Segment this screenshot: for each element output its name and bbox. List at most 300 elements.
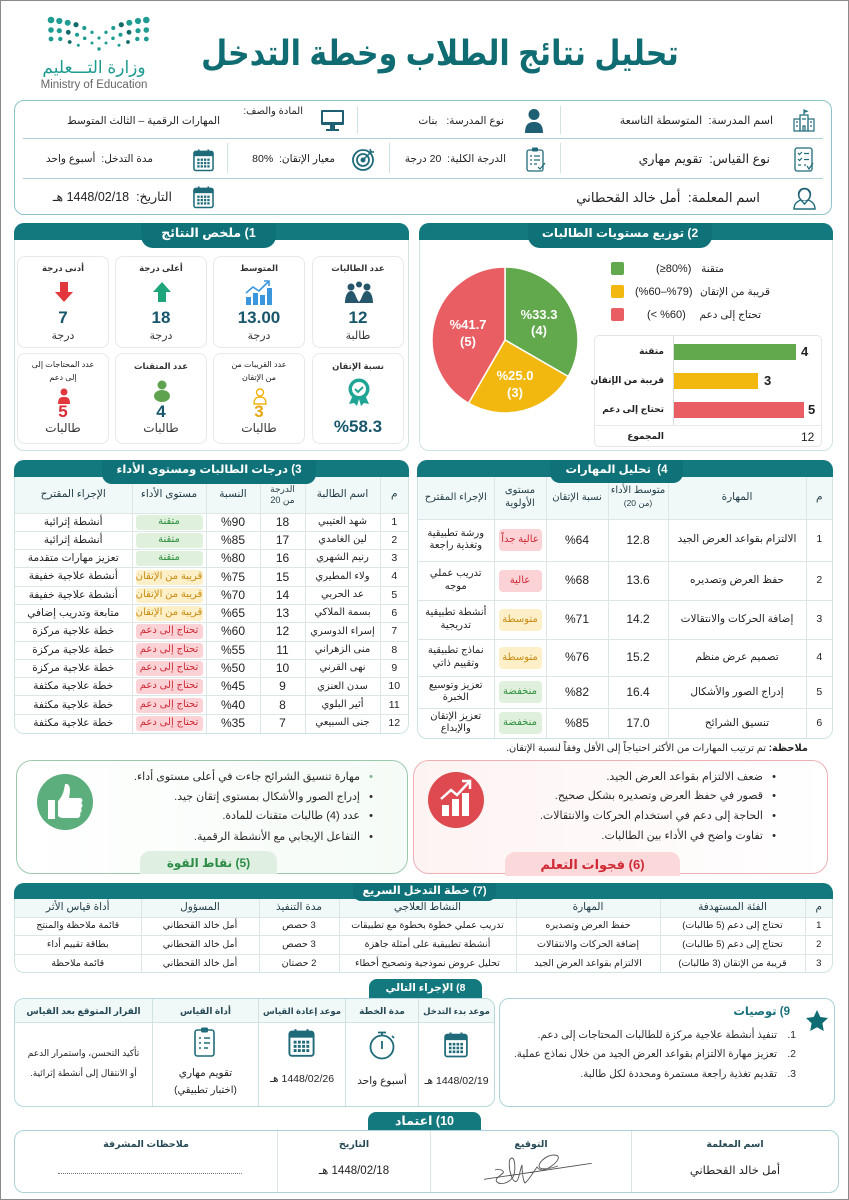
date: التاريخ: 1448/02/18 هـ — [53, 190, 172, 204]
table: student grades: خطة علاجية مكثفة — [33, 699, 113, 711]
table: student grades: متقنة — [158, 516, 180, 527]
table: student grades: عد الحربي — [321, 589, 364, 600]
table: student grades: مستوى الأداء — [141, 488, 197, 500]
table: student grades: رنيم الشهري — [316, 552, 369, 563]
table: student grades: %65 — [221, 606, 245, 620]
table: student grades: %60 — [221, 624, 245, 638]
table: student grades: 1 — [391, 516, 397, 528]
column: reassessment date: 1448/02/26 هـ — [270, 1073, 334, 1085]
gaps list: • — [772, 810, 776, 822]
column: expected decision: القرار المتوقع بعد القياس — [26, 1006, 141, 1016]
icon: growth chart — [428, 772, 484, 828]
table: intervention plan: مدة التنفيذ — [276, 901, 322, 913]
table: intervention plan: حفظ العرض وتصديره — [545, 920, 631, 931]
icon: target — [352, 148, 374, 171]
table: student grades: 4 — [391, 570, 397, 582]
table: skills analysis: 13.6 — [626, 573, 650, 587]
table: student grades: نهى القرني — [319, 662, 366, 673]
table: intervention plan: أمل خالد القحطاني — [163, 958, 237, 969]
strengths list: التفاعل الإيجابي مع الأنشطة الرقمية. — [194, 831, 360, 843]
table: student grades: أنشطة إثرائية — [44, 534, 103, 546]
column: reassessment date — [263, 1006, 341, 1085]
table: skills analysis: 5 — [816, 686, 822, 698]
table: student grades: أثير البلوي — [321, 699, 364, 710]
gaps list: • — [772, 830, 776, 842]
column: assessment tool: (اختبار تطبيقي) — [174, 1085, 237, 1096]
table: skills analysis: والإبداع — [441, 723, 471, 734]
table: skills analysis: %64 — [565, 532, 589, 546]
table: student grades: لين الغامدي — [318, 534, 367, 545]
card: lowest score: أدنى درجة — [42, 263, 84, 273]
panel: 4 skills analysis — [417, 460, 833, 739]
heading: learning gaps — [505, 852, 680, 876]
table: student grades: %35 — [221, 716, 245, 730]
card: highest score: درجة — [150, 330, 172, 342]
pie chart: (5) — [460, 334, 476, 349]
card: average: المتوسط — [240, 263, 278, 273]
bar chart: 3 — [764, 373, 771, 388]
icon: chart — [246, 280, 272, 305]
gaps list: • — [772, 771, 776, 783]
table: intervention plan: 2 حصتان — [282, 958, 316, 969]
legend: (%60–%79) — [635, 286, 692, 298]
table: student grades: تحتاج إلى دعم — [140, 644, 198, 655]
table: student grades — [15, 477, 408, 733]
strengths list: إدراج الصور والأشكال بمستوى إتقان جيد. — [174, 791, 360, 803]
table: intervention plan: المسؤول — [180, 901, 220, 913]
card: highest score: أعلى درجة — [139, 263, 183, 273]
table: student grades: %90 — [221, 515, 245, 529]
card: highest score — [115, 256, 207, 348]
table: student grades: سدن العنزي — [317, 681, 368, 692]
column: assessment tool — [174, 1005, 237, 1096]
table: student grades: الدرجة — [270, 484, 295, 494]
column: assessment tool: تقويم مهاري — [179, 1067, 232, 1079]
icon: teacher — [793, 188, 816, 210]
table: student grades: تعزيز مهارات متقدمة — [28, 552, 119, 564]
card: average: 13.00 — [238, 308, 280, 327]
recommendations list — [514, 1028, 796, 1080]
table: student grades: بسمة الملاكي — [314, 607, 371, 618]
gaps list: تفاوت واضح في الأداء بين الطالبات. — [601, 830, 763, 842]
table: skills analysis: الالتزام بقواعد العرض الجيد — [678, 533, 796, 545]
table: student grades: متابعة وتدريب إضافي — [27, 607, 119, 619]
column: expected decision: تأكيد التحسن، واستمرار الدعم — [28, 1048, 139, 1058]
card: mastery rate: نسبة الإتقان — [332, 361, 384, 371]
table: skills analysis: نسبة الإتقان — [552, 492, 602, 502]
mastery criterion: معيار الإتقان: %80 — [252, 153, 335, 165]
recommendations list: تنفيذ أنشطة علاجية مركزة للطالبات المحتاجات إلى دعم. — [538, 1030, 777, 1041]
table: student grades: %40 — [221, 698, 245, 712]
legend: (< %60) — [647, 309, 686, 321]
panel: 9 recommendations — [499, 998, 835, 1107]
date column — [278, 1131, 430, 1192]
table: skills analysis: الإجراء المقترح — [425, 492, 487, 502]
table: skills analysis: منخفضة — [503, 717, 537, 728]
table: skills analysis: تعزيز الإتقان — [430, 711, 481, 722]
card: students count: طالبة — [346, 330, 370, 342]
panel: 5 strengths — [16, 760, 408, 874]
strengths list: • — [369, 831, 373, 843]
table: student grades: خطة علاجية مكثفة — [33, 680, 113, 692]
table: intervention plan: المهارة — [573, 901, 603, 913]
strengths list — [134, 769, 373, 843]
column: plan duration: مدة الخطة — [359, 1006, 405, 1016]
legend: تحتاج إلى دعم — [700, 309, 761, 321]
table: student grades: إسراء الدوسري — [310, 626, 375, 637]
panel: 1 results summary — [14, 223, 409, 451]
icon: down arrow — [55, 282, 73, 302]
bar: mastered — [674, 344, 796, 360]
table: student grades: %75 — [221, 570, 245, 584]
table: student grades: 17 — [276, 533, 289, 547]
table: student grades: قريبة من الإتقان — [136, 607, 202, 618]
pie chart: %33.3 — [521, 307, 557, 322]
icon: calendar date — [193, 186, 214, 208]
column: start date: موعد بدء التدخل — [423, 1006, 490, 1016]
card: mastered count — [115, 353, 207, 444]
table: student grades: تحتاج إلى دعم — [140, 717, 198, 728]
table: student grades: %70 — [221, 588, 245, 602]
bar chart: المجموع — [627, 431, 664, 441]
title: تحليل نتائج الطلاب وخطة التدخل — [201, 34, 679, 73]
table: student grades: أنشطة إثرائية — [44, 516, 103, 528]
table: skills analysis: عالية جداً — [501, 534, 539, 545]
card: needs support count — [17, 353, 109, 444]
heading: 8 next action — [369, 979, 482, 998]
table: student grades: منى الزهراني — [315, 644, 370, 655]
table: skills analysis: تعزيز وتوسيع — [429, 680, 483, 691]
table: intervention plan — [15, 899, 832, 973]
strengths list: • — [369, 791, 373, 803]
legend: قريبة من الإتقان — [700, 286, 770, 298]
recommendations list: 2. — [787, 1049, 796, 1060]
table: skills analysis: نماذج تطبيقية — [428, 645, 484, 656]
pie chart: (4) — [531, 323, 547, 338]
table: student grades: اسم الطالبة — [317, 488, 368, 500]
table: student grades: 11 — [276, 643, 289, 657]
icon: badge — [348, 378, 370, 406]
table: skills analysis: م — [816, 491, 822, 503]
table: skills analysis: إضافة الحركات والانتقالات — [681, 613, 793, 625]
table: student grades: 9 — [391, 662, 397, 674]
table: student grades: %55 — [221, 643, 245, 657]
table: skills analysis: 14.2 — [626, 612, 650, 626]
heading: distribution: 2) توزيع مستويات الطالبات — [542, 226, 698, 240]
strengths list: • — [369, 810, 373, 822]
teacher name: اسم المعلمة: أمل خالد القحطاني — [576, 190, 760, 205]
signature column: التوقيع — [514, 1139, 548, 1150]
table: skills analysis: الأولوية — [505, 498, 535, 509]
table: intervention plan: قريبة من الإتقان (3 طالبات) — [678, 958, 787, 969]
icon: star — [806, 1010, 828, 1031]
table: student grades: قريبة من الإتقان — [136, 589, 202, 600]
strengths list: • — [369, 771, 373, 783]
table: student grades: 3 — [391, 552, 397, 564]
table: student grades: 10 — [276, 661, 289, 675]
heading: recommendations: 9) توصيات — [733, 1006, 790, 1018]
table: intervention plan: تحليل عروض نموذجية وتصحيح أخطاء — [355, 958, 500, 969]
recommendations list: 1. — [787, 1030, 796, 1041]
table: student grades: 16 — [276, 551, 289, 565]
recommendations list: تقديم تغذية راجعة مستمرة ومحددة لكل طالبة. — [580, 1069, 777, 1080]
table: student grades: تحتاج إلى دعم — [140, 680, 198, 691]
table: student grades: 8 — [279, 698, 286, 712]
table: skills analysis: 4 — [816, 651, 822, 663]
table: intervention plan: 3 حصص — [282, 939, 316, 950]
slice: mastered — [505, 267, 578, 376]
heading: intervention plan — [353, 883, 496, 901]
heading: 10 approval — [368, 1112, 481, 1131]
logo: Ministry of Education — [41, 16, 150, 91]
bar: needs support — [674, 402, 804, 418]
heading: student grades: 3) درجات الطالبات ومستوى الأداء — [116, 464, 302, 476]
heading: strengths — [140, 851, 277, 874]
panel: 6 learning gaps — [413, 760, 828, 874]
icon: up arrow — [153, 282, 171, 302]
card: near mastery count: من الإتقان — [242, 373, 276, 382]
table: skills analysis: %68 — [565, 573, 589, 587]
card: highest score: 18 — [152, 308, 170, 327]
table: intervention plan: تحتاج إلى دعم (5 طالبات) — [682, 939, 783, 950]
table: student grades: 9 — [279, 679, 286, 693]
table: skills analysis: الخبرة — [443, 692, 469, 703]
bar chart: قريبة من الإتقان — [591, 375, 664, 385]
column: start date: 1448/02/19 هـ — [424, 1075, 489, 1087]
panel: school information — [14, 100, 832, 215]
table: skills analysis: %76 — [565, 650, 589, 664]
table: skills analysis: تنسيق الشرائح — [705, 717, 769, 729]
card: near mastery count: عدد القريبات من — [231, 360, 287, 369]
table: student grades: شهد العتيبي — [318, 516, 367, 527]
table: intervention plan: 2 — [816, 939, 821, 950]
icon: thumbs up — [37, 774, 93, 830]
table: skills analysis: مستوى — [505, 485, 535, 496]
heading: distribution — [528, 223, 712, 248]
icon: calendar — [444, 1032, 468, 1058]
icon: calendar — [193, 150, 214, 172]
icon: monitor — [321, 110, 344, 131]
teacher column: أمل خالد القحطاني — [690, 1165, 780, 1177]
table: student grades: 14 — [276, 588, 289, 602]
pie chart: (3) — [507, 385, 523, 400]
card: lowest score: درجة — [52, 330, 74, 342]
table: intervention plan: الالتزام بقواعد العرض الجيد — [534, 958, 642, 969]
bar: near mastery — [674, 373, 758, 389]
table: skills analysis: متوسط الأداء — [611, 485, 665, 496]
card: lowest score: 7 — [58, 308, 68, 327]
table: skills analysis: المهارة — [722, 491, 752, 503]
icon: red person — [58, 388, 70, 404]
strengths list: مهارة تنسيق الشرائح جاءت في أعلى مستوى أداء. — [134, 771, 360, 783]
table: student grades: تحتاج إلى دعم — [140, 625, 198, 636]
table: skills analysis: وتغذية راجعة — [429, 540, 482, 551]
legend — [611, 262, 770, 321]
panel: 3 student grades and performance — [14, 460, 409, 734]
table: student grades: جنى السبيعي — [315, 717, 370, 728]
column: plan duration — [357, 1006, 407, 1087]
logo dots — [48, 16, 150, 51]
card: students count: 12 — [349, 308, 367, 327]
table: student grades: تحتاج إلى دعم — [140, 699, 198, 710]
icon: yellow person — [253, 388, 267, 405]
table: skills analysis: إدراج الصور والأشكال — [690, 686, 784, 698]
table: skills analysis: 16.4 — [626, 685, 650, 699]
heading: 8 next action: 8) الإجراء التالي — [386, 982, 466, 994]
table: student grades: 7 — [279, 716, 286, 730]
gaps list: ضعف الالتزام بقواعد العرض الجيد. — [606, 771, 763, 783]
table: student grades: %85 — [221, 533, 245, 547]
table: student grades: %50 — [221, 661, 245, 675]
table: intervention plan: أمل خالد القحطاني — [163, 920, 237, 931]
table: student grades: خطة علاجية مركزة — [32, 662, 114, 674]
card: near mastery count: 3 — [254, 402, 264, 421]
table: skills analysis: 6 — [816, 717, 822, 729]
table: skills analysis: تدريجية — [440, 620, 471, 631]
icon: school — [793, 109, 815, 132]
card: needs support count: طالبات — [45, 421, 81, 435]
strengths list: عدد (4) طالبات متقنات للمادة. — [222, 810, 360, 822]
card: average — [213, 256, 305, 348]
column: expected decision: أو الانتقال إلى أنشطة إثرائية. — [30, 1068, 137, 1078]
table: skills analysis: عالية — [510, 575, 530, 586]
table: student grades: 7 — [391, 625, 397, 637]
table: intervention plan: 1 — [816, 920, 821, 931]
column: reassessment date: موعد إعادة القياس — [263, 1006, 341, 1016]
card: lowest score — [17, 256, 109, 348]
table: student grades: 18 — [276, 515, 289, 529]
heading: student grades — [102, 460, 316, 484]
subject label: المادة والصف: — [243, 106, 303, 117]
table: intervention plan: قائمة ملاحظة والمنتج — [36, 920, 119, 931]
heading: results summary: 1) ملخص النتائج — [161, 226, 256, 240]
signature column — [431, 1131, 631, 1192]
card: needs support count: إلى دعم — [49, 373, 77, 382]
table: skills analysis: أنشطة تطبيقية — [425, 607, 486, 618]
icon: clipboard — [526, 148, 546, 172]
icon: clipboard — [194, 1028, 215, 1057]
table: student grades: 11 — [389, 699, 400, 711]
heading: skills analysis — [550, 460, 683, 483]
table: student grades: خطة علاجية مركزة — [32, 644, 114, 656]
card: needs support count: عدد المحتاجات إلى — [32, 360, 94, 369]
table: skills analysis: %82 — [565, 685, 589, 699]
table: intervention plan: م — [815, 901, 822, 913]
table: intervention plan: قائمة ملاحظة — [51, 958, 104, 969]
table: student grades: %45 — [221, 679, 245, 693]
column: start date — [423, 1006, 490, 1087]
table: intervention plan: بطاقة تقييم أداء — [47, 939, 109, 950]
recommendations list: تعزيز مهارة الالتزام بقواعد العرض الجيد من خلال نماذج عملية. — [514, 1049, 777, 1060]
card: needs support count: 5 — [58, 402, 68, 421]
table: intervention plan: أمل خالد القحطاني — [163, 939, 237, 950]
school name: اسم المدرسة: المتوسطة التاسعة — [620, 115, 773, 127]
table: student grades: 12 — [276, 624, 289, 638]
table: student grades: أنشطة علاجية خفيفة — [29, 589, 118, 601]
icon: checklist — [794, 147, 814, 172]
table: student grades: 12 — [388, 717, 400, 729]
school type: نوع المدرسة: بنات — [418, 115, 504, 127]
table: student grades: %80 — [221, 551, 245, 565]
table: student grades: خطة علاجية مكثفة — [33, 717, 113, 729]
total score: الدرجة الكلية: 20 درجة — [405, 153, 506, 165]
card: mastered count: 4 — [156, 402, 166, 421]
table: skills analysis: 15.2 — [626, 650, 650, 664]
table: student grades: 5 — [391, 589, 397, 601]
card: students count — [312, 256, 404, 348]
table: student grades: 15 — [276, 570, 289, 584]
bar chart: 5 — [808, 402, 815, 417]
card: mastered count: عدد المتقنات — [134, 361, 188, 371]
pie chart — [432, 268, 578, 412]
table: intervention plan: 3 — [816, 958, 821, 969]
table: intervention plan: النشاط العلاجي — [394, 901, 461, 913]
heading: 10 approval: 10) اعتماد — [395, 1114, 454, 1128]
table: intervention plan: 3 حصص — [282, 920, 316, 931]
panel: 10 approval — [14, 1130, 839, 1193]
date column: التاريخ — [339, 1139, 369, 1150]
gaps list: قصور في حفظ العرض وتصديره بشكل صحيح. — [555, 790, 763, 802]
table: skills analysis: موجه — [445, 581, 467, 592]
column: expected decision — [26, 1006, 141, 1078]
panel: 2 student level distribution — [419, 223, 833, 451]
legend: (≥80%) — [656, 263, 691, 275]
table: student grades: النسبة — [219, 488, 247, 500]
card: near mastery count: طالبات — [241, 421, 277, 435]
heading: intervention plan: (7) خطة التدخل السريع — [362, 885, 487, 897]
table: intervention plan: الفئة المستهدفة — [698, 901, 767, 913]
subject value: المهارات الرقمية – الثالث المتوسط — [67, 115, 220, 127]
icon: green person — [154, 380, 170, 402]
table: student grades: 6 — [391, 607, 397, 619]
table: skills analysis — [418, 477, 832, 738]
heading: skills analysis: 4) تحليل المهارات — [565, 464, 668, 476]
table: student grades: خطة علاجية مركزة — [32, 625, 114, 637]
table: student grades: الإجراء المقترح — [41, 488, 106, 500]
table: skills analysis: متوسطة — [502, 614, 538, 625]
intervention duration: مدة التدخل: أسبوع واحد — [46, 153, 153, 165]
column: assessment tool: أداة القياس — [180, 1006, 231, 1016]
table: intervention plan: أداة قياس الأثر — [46, 901, 110, 913]
column: plan duration: أسبوع واحد — [357, 1075, 407, 1087]
note: ملاحظة: تم ترتيب المهارات من الأكثر احتياجاً إلى الأقل وفقاً لنسبة الإتقان. — [506, 743, 808, 754]
bar chart — [594, 335, 822, 447]
table: student grades: 13 — [276, 606, 289, 620]
logo arabic name: وزارة التـــعليم — [42, 58, 146, 77]
card: near mastery count — [213, 353, 305, 444]
slice: near mastery — [468, 340, 568, 413]
date column: 1448/02/18 هـ — [319, 1165, 389, 1177]
table: student grades: أنشطة علاجية خفيفة — [29, 570, 118, 582]
assessment type: نوع القياس: تقويم مهاري — [639, 152, 770, 166]
card: mastery rate — [312, 353, 404, 444]
bar chart: 12 — [801, 430, 814, 444]
supervisor notes column: ملاحظات المشرفة — [103, 1139, 189, 1150]
table: skills analysis: 17.0 — [626, 716, 650, 730]
table: intervention plan: تحتاج إلى دعم (5 طالبات) — [682, 920, 783, 931]
table: skills analysis: منخفضة — [503, 686, 537, 697]
gaps list: الحاجة إلى دعم في استخدام الحركات والانتقالات. — [540, 810, 763, 822]
table: skills analysis: ورشة تطبيقية — [427, 528, 484, 538]
pie chart: %41.7 — [450, 317, 486, 332]
signature — [484, 1157, 596, 1187]
table: skills analysis: تدريب عملي — [430, 568, 482, 579]
table: skills analysis: وتقييم ذاتي — [432, 658, 479, 669]
gaps list: • — [772, 790, 776, 802]
card: students count: عدد الطالبات — [331, 263, 385, 273]
table: student grades: من 20 — [270, 495, 295, 505]
table: student grades: تحتاج إلى دعم — [140, 662, 198, 673]
